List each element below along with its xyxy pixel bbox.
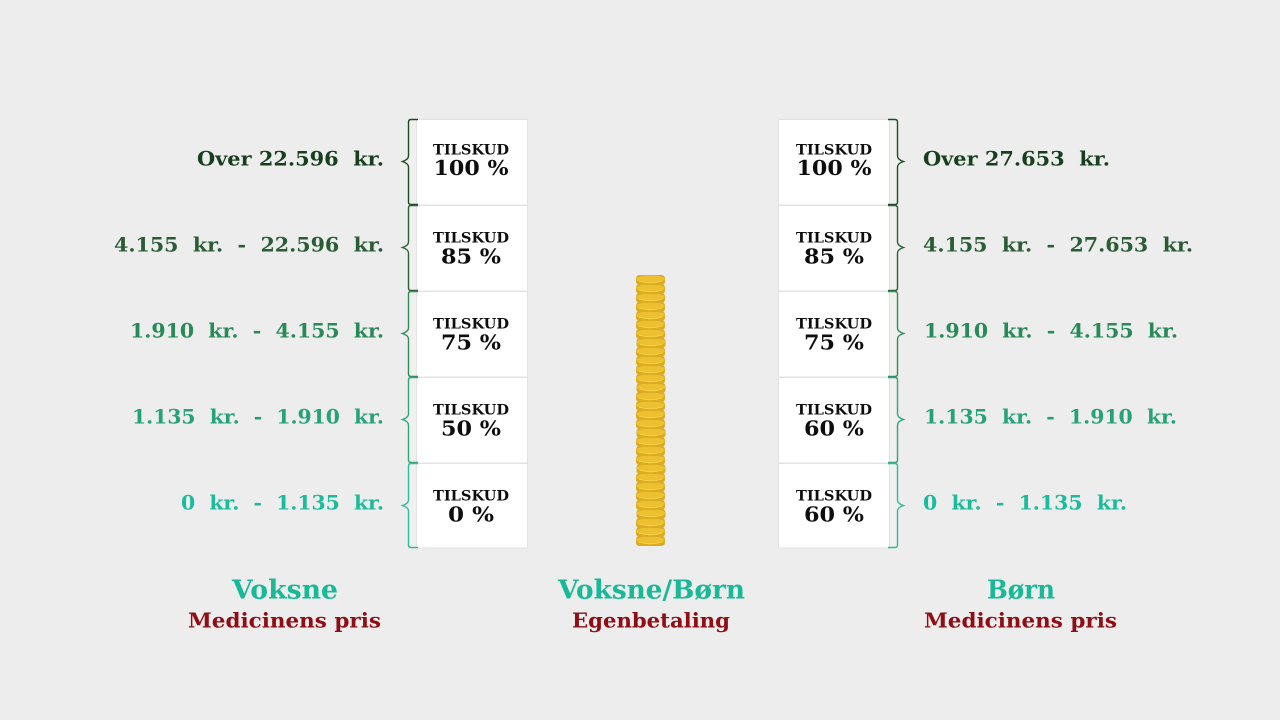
panel: adult subsidy cards [416, 120, 528, 548]
card: 100 %: 100 % [434, 156, 508, 180]
card: 100 % [416, 120, 528, 205]
icon: coin stack [636, 275, 666, 546]
left braces [402, 120, 418, 548]
panel: children subsidy cards [778, 120, 890, 548]
heading: Voksne/Børn: Voksne/Børn [557, 576, 745, 606]
card: 75 % [416, 292, 528, 377]
card: 0 % [416, 464, 528, 548]
card: 60 %: 60 % [804, 416, 864, 440]
card: 60 %: TILSKUD [796, 488, 872, 504]
card: 50 %: TILSKUD [433, 402, 509, 418]
price: over: Over 27.653 kr. [923, 148, 1110, 170]
card: 60 %: TILSKUD [796, 402, 872, 418]
card: 60 %: 60 % [804, 502, 864, 526]
price: 1.135 to 1.910: 1.135 kr. - 1.910 kr. [132, 406, 384, 428]
price: over: Over 22.596 kr. [197, 148, 384, 170]
left price ranges [114, 148, 384, 514]
card: 0 %: 0 % [448, 502, 494, 526]
heading: Voksne [188, 576, 381, 632]
card: 75 %: 75 % [804, 330, 864, 354]
heading: Voksne/Børn: Egenbetaling [572, 608, 730, 632]
card: 50 % [416, 378, 528, 463]
card: 100 %: 100 % [796, 156, 872, 180]
heading: Voksne: Voksne [231, 576, 338, 606]
card: 75 % [778, 292, 890, 377]
card: 50 %: 50 % [441, 416, 501, 440]
card: 0 %: TILSKUD [433, 488, 509, 504]
price: 1.135 to 1.910: 1.135 kr. - 1.910 kr. [924, 406, 1177, 428]
heading: Voksne/Børn [557, 576, 745, 632]
price: 4.155 to 27.653: 4.155 kr. - 27.653 kr. [923, 234, 1193, 256]
right price ranges [923, 148, 1193, 514]
price: 1.910 to 4.155: 1.910 kr. - 4.155 kr. [130, 320, 384, 342]
heading: Børn: Medicinens pris [924, 608, 1117, 632]
price: 0 to 1.135: 0 kr. - 1.135 kr. [181, 492, 384, 514]
card: 85 % [416, 206, 528, 291]
card: 75 %: TILSKUD [796, 316, 872, 332]
card: 100 %: TILSKUD [796, 142, 872, 158]
card: 85 %: TILSKUD [433, 230, 509, 246]
price: 4.155 to 22.596: 4.155 kr. - 22.596 kr. [114, 234, 384, 256]
card: 100 %: TILSKUD [433, 142, 509, 158]
card: 75 %: TILSKUD [433, 316, 509, 332]
card: 85 % [778, 206, 890, 291]
card: 75 %: 75 % [441, 330, 501, 354]
card: 85 %: 85 % [804, 244, 864, 268]
card: 85 %: TILSKUD [796, 230, 872, 246]
right braces [888, 120, 904, 548]
card: 100 % [778, 120, 890, 205]
price: 0 to 1.135: 0 kr. - 1.135 kr. [923, 492, 1127, 514]
heading: Børn: Børn [987, 576, 1055, 606]
price: 1.910 to 4.155: 1.910 kr. - 4.155 kr. [924, 320, 1178, 342]
heading: Voksne: Medicinens pris [188, 608, 381, 632]
card: 85 %: 85 % [441, 244, 501, 268]
heading: Børn [924, 576, 1117, 632]
card: 60 % [778, 464, 890, 548]
card: 60 % [778, 378, 890, 463]
